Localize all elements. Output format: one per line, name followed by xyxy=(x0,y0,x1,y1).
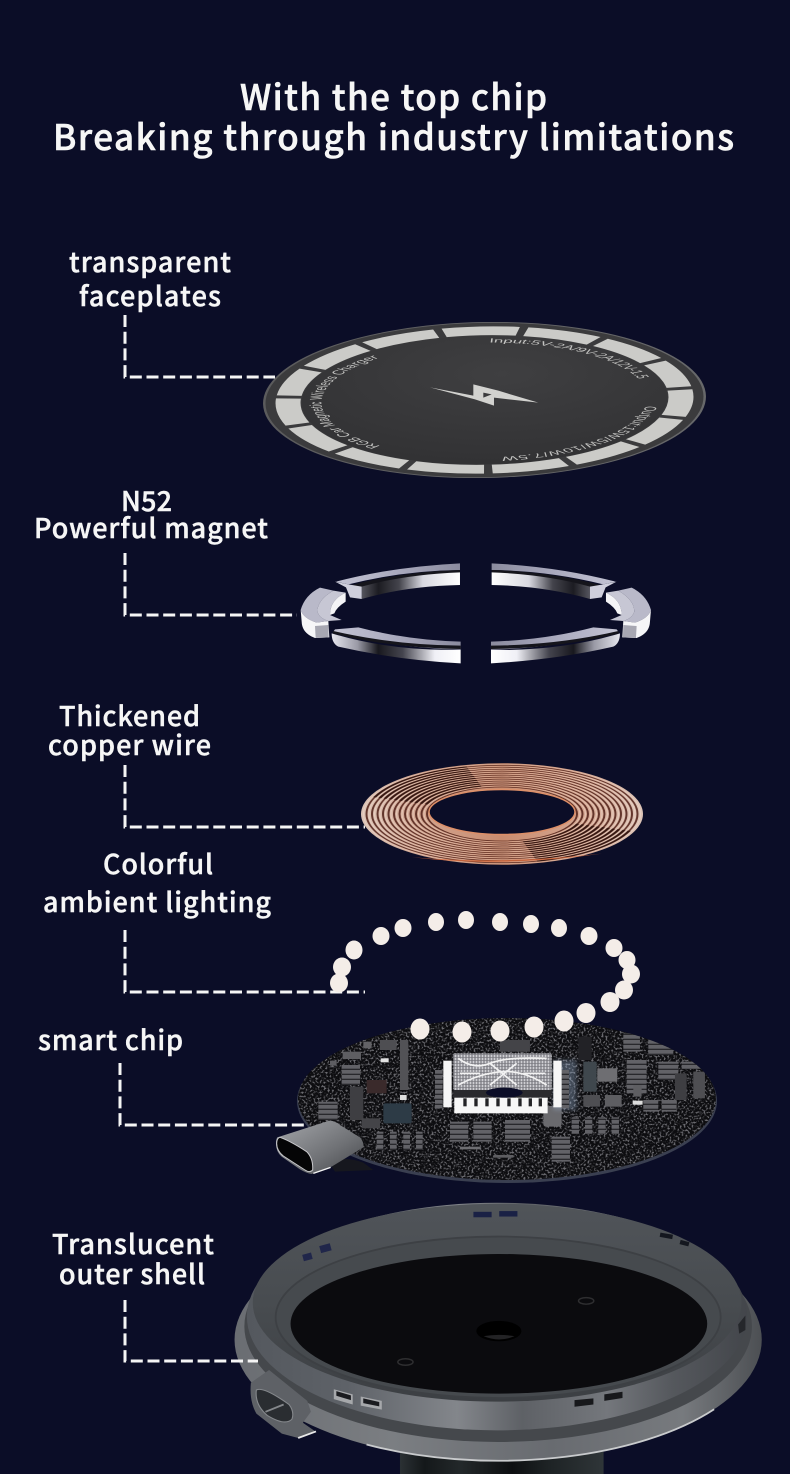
faceplate illustration: RGB Car Magnetic Wireless Charger xyxy=(309,356,380,449)
label: N52 Powerful magnet: N52 xyxy=(121,480,172,519)
icon: lightning bolt xyxy=(430,384,538,406)
inner disc xyxy=(291,1254,707,1394)
label: Thickened copper wire: copper wire xyxy=(48,724,211,763)
faceplate illustration: Output:15W/5W/10W/7.5W xyxy=(502,406,656,461)
label: Colorful ambient lighting xyxy=(43,843,271,920)
label: smart chip: smart chip xyxy=(38,1019,183,1058)
shell connector port xyxy=(251,1370,316,1438)
leader line: copper wire xyxy=(125,765,365,827)
faceplate illustration xyxy=(263,322,706,478)
title xyxy=(53,70,734,161)
faceplate illustration: Input:5V-2A/9V-2A/12V-1.5A xyxy=(490,338,649,378)
magnets: right half xyxy=(491,563,651,663)
wall xyxy=(247,1203,747,1430)
leader line: faceplates xyxy=(125,315,275,377)
leader line: magnet xyxy=(125,553,297,615)
label: transparent faceplates: transparent xyxy=(69,241,231,280)
ambient lighting LED dots xyxy=(330,911,640,1042)
label: N52 Powerful magnet: Powerful magnet xyxy=(34,507,268,546)
title: Breaking through industry limitations xyxy=(53,110,734,161)
vent slots xyxy=(302,1211,745,1410)
label: Colorful ambient lighting: Colorful xyxy=(103,843,213,882)
stem xyxy=(400,1452,604,1474)
icon: main chip xyxy=(435,1053,577,1113)
label: Translucent outer shell: outer shell xyxy=(59,1253,205,1292)
USB-C connector xyxy=(276,1121,373,1174)
magnet ring illustration xyxy=(301,563,651,663)
leader line: smart chip xyxy=(120,1063,305,1125)
flange xyxy=(235,1219,762,1461)
outer shell illustration xyxy=(235,1203,762,1474)
magnets: left half xyxy=(301,563,461,663)
label: Colorful ambient lighting: ambient lighting xyxy=(43,881,271,920)
label: N52 Powerful magnet xyxy=(34,480,268,546)
copper coil illustration xyxy=(328,751,676,877)
centre hole xyxy=(476,1321,521,1341)
title: With the top chip xyxy=(240,70,547,121)
leader line: ambient lighting xyxy=(125,930,365,992)
label: transparent faceplates xyxy=(69,241,231,314)
smart chip board illustration xyxy=(297,1018,717,1183)
label: Translucent outer shell xyxy=(52,1223,214,1292)
label: transparent faceplates: faceplates xyxy=(79,275,221,314)
leader line: outer shell xyxy=(125,1300,258,1361)
label: Thickened copper wire: Thickened xyxy=(59,695,200,734)
label: Thickened copper wire xyxy=(48,695,211,763)
label: Translucent outer shell: Translucent xyxy=(52,1223,214,1262)
